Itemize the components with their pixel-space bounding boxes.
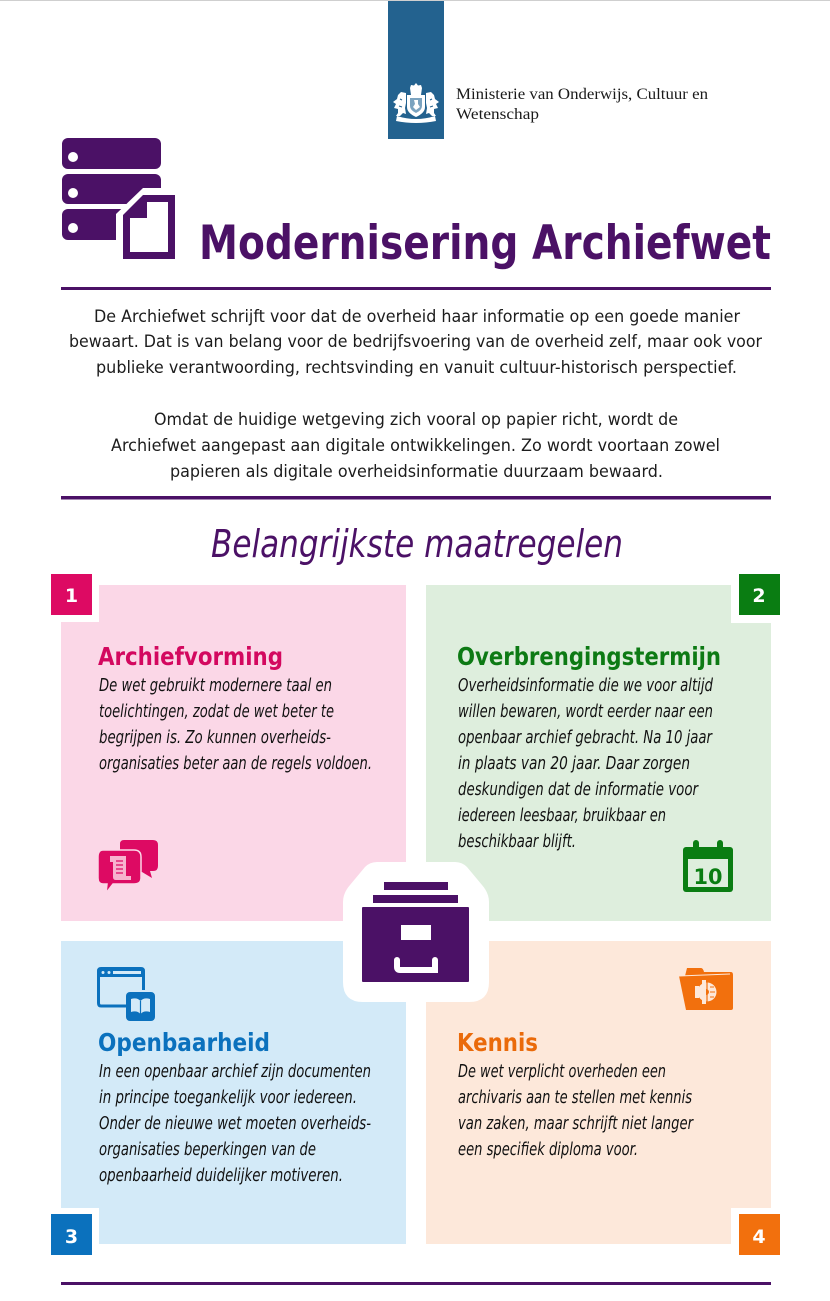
intro text: Omdat de huidige wetgeving zich vooral op papier richt, wordt de	[154, 410, 678, 429]
heading: Overbrengingstermijn	[457, 642, 721, 671]
body text: Onder de nieuwe wet moeten overheids-	[99, 1114, 371, 1134]
body text: toelichtingen, zodat de wet beter te	[99, 702, 334, 722]
panel: Kennis	[426, 941, 780, 1255]
body text: organisaties beperkingen van de	[99, 1140, 316, 1160]
icon: folder with gear and brain	[679, 968, 733, 1010]
body text: in plaats van 20 jaar. Daar zorgen	[458, 754, 690, 774]
icon: archive server with document	[62, 138, 175, 259]
body text: deskundigen dat de informatie voor	[458, 780, 699, 800]
number badge 2	[739, 574, 780, 615]
ministry name: Wetenschap	[456, 106, 539, 123]
body text: willen bewaren, wordt eerder naar een	[458, 702, 713, 722]
intro text: bewaart. Dat is van belang voor de bedrijfsvoering van de overheid zelf, maar ook voor	[69, 332, 762, 351]
number badge 2: 2	[752, 585, 766, 607]
panel: Archiefvorming	[51, 574, 406, 921]
body text: In een openbaar archief zijn documenten	[99, 1062, 371, 1082]
body text: van zaken, maar schrijft niet langer	[458, 1114, 694, 1134]
number badge 4	[739, 1214, 780, 1255]
body text	[458, 676, 714, 852]
body text: beschikbaar blijft.	[458, 832, 576, 852]
ministry name: Ministerie van Onderwijs, Cultuur en	[456, 86, 708, 103]
logo bar	[388, 1, 444, 139]
intro text: publieke verantwoording, rechtsvinding en vanuit cultuur-historisch perspectief.	[96, 358, 737, 377]
body text: begrijpen is. Zo kunnen overheids-	[99, 728, 331, 748]
body text: iedereen leesbaar, bruikbaar en	[458, 806, 666, 826]
icon: royal crest	[393, 83, 439, 123]
body text	[458, 1062, 694, 1160]
intro text: papieren als digitale overheidsinformatie duurzaam bewaard.	[170, 462, 663, 481]
panel: Openbaarheid	[51, 941, 406, 1255]
intro text	[69, 307, 762, 481]
body text: openbaar archief gebracht. Na 10 jaar	[458, 728, 713, 748]
heading: Openbaarheid	[98, 1028, 270, 1057]
logo: ministry	[388, 1, 708, 139]
number badge 1	[51, 574, 92, 615]
intro text: Archiefwet aangepast aan digitale ontwikkelingen. Zo wordt voortaan zowel	[111, 436, 720, 455]
body text: in principe toegankelijk voor iedereen.	[99, 1088, 357, 1108]
intro text: De Archiefwet schrijft voor dat de overheid haar informatie op een goede manier	[94, 307, 740, 326]
heading: Archiefvorming	[98, 642, 283, 671]
number badge 3: 3	[65, 1226, 78, 1248]
body text: organisaties beter aan de regels voldoen.	[99, 754, 372, 774]
body text: De wet gebruikt modernere taal en	[99, 676, 332, 696]
ministry name	[456, 86, 708, 123]
body text: archivaris aan te stellen met kennis	[458, 1088, 692, 1108]
body text	[99, 676, 372, 774]
section heading: Belangrijkste maatregelen	[211, 522, 623, 566]
body text	[99, 1062, 371, 1186]
icon: calendar	[683, 840, 733, 892]
body text: Overheidsinformatie die we voor altijd	[458, 676, 714, 696]
number badge 4: 4	[752, 1226, 766, 1248]
panel: Overbrengingstermijn	[426, 574, 780, 921]
icon: calendar: 10	[694, 865, 722, 889]
heading: Kennis	[457, 1028, 538, 1057]
body text: De wet verplicht overheden een	[458, 1062, 666, 1082]
number badge 3	[51, 1214, 92, 1255]
body text: openbaarheid duidelijker motiveren.	[99, 1166, 343, 1186]
icon: speech bubbles with scroll	[98, 840, 158, 893]
icon: browser window with book	[98, 968, 155, 1021]
number badge 1: 1	[65, 585, 78, 607]
body text: een specifiek diploma voor.	[458, 1140, 638, 1160]
icon: archive drawer	[343, 862, 489, 1002]
